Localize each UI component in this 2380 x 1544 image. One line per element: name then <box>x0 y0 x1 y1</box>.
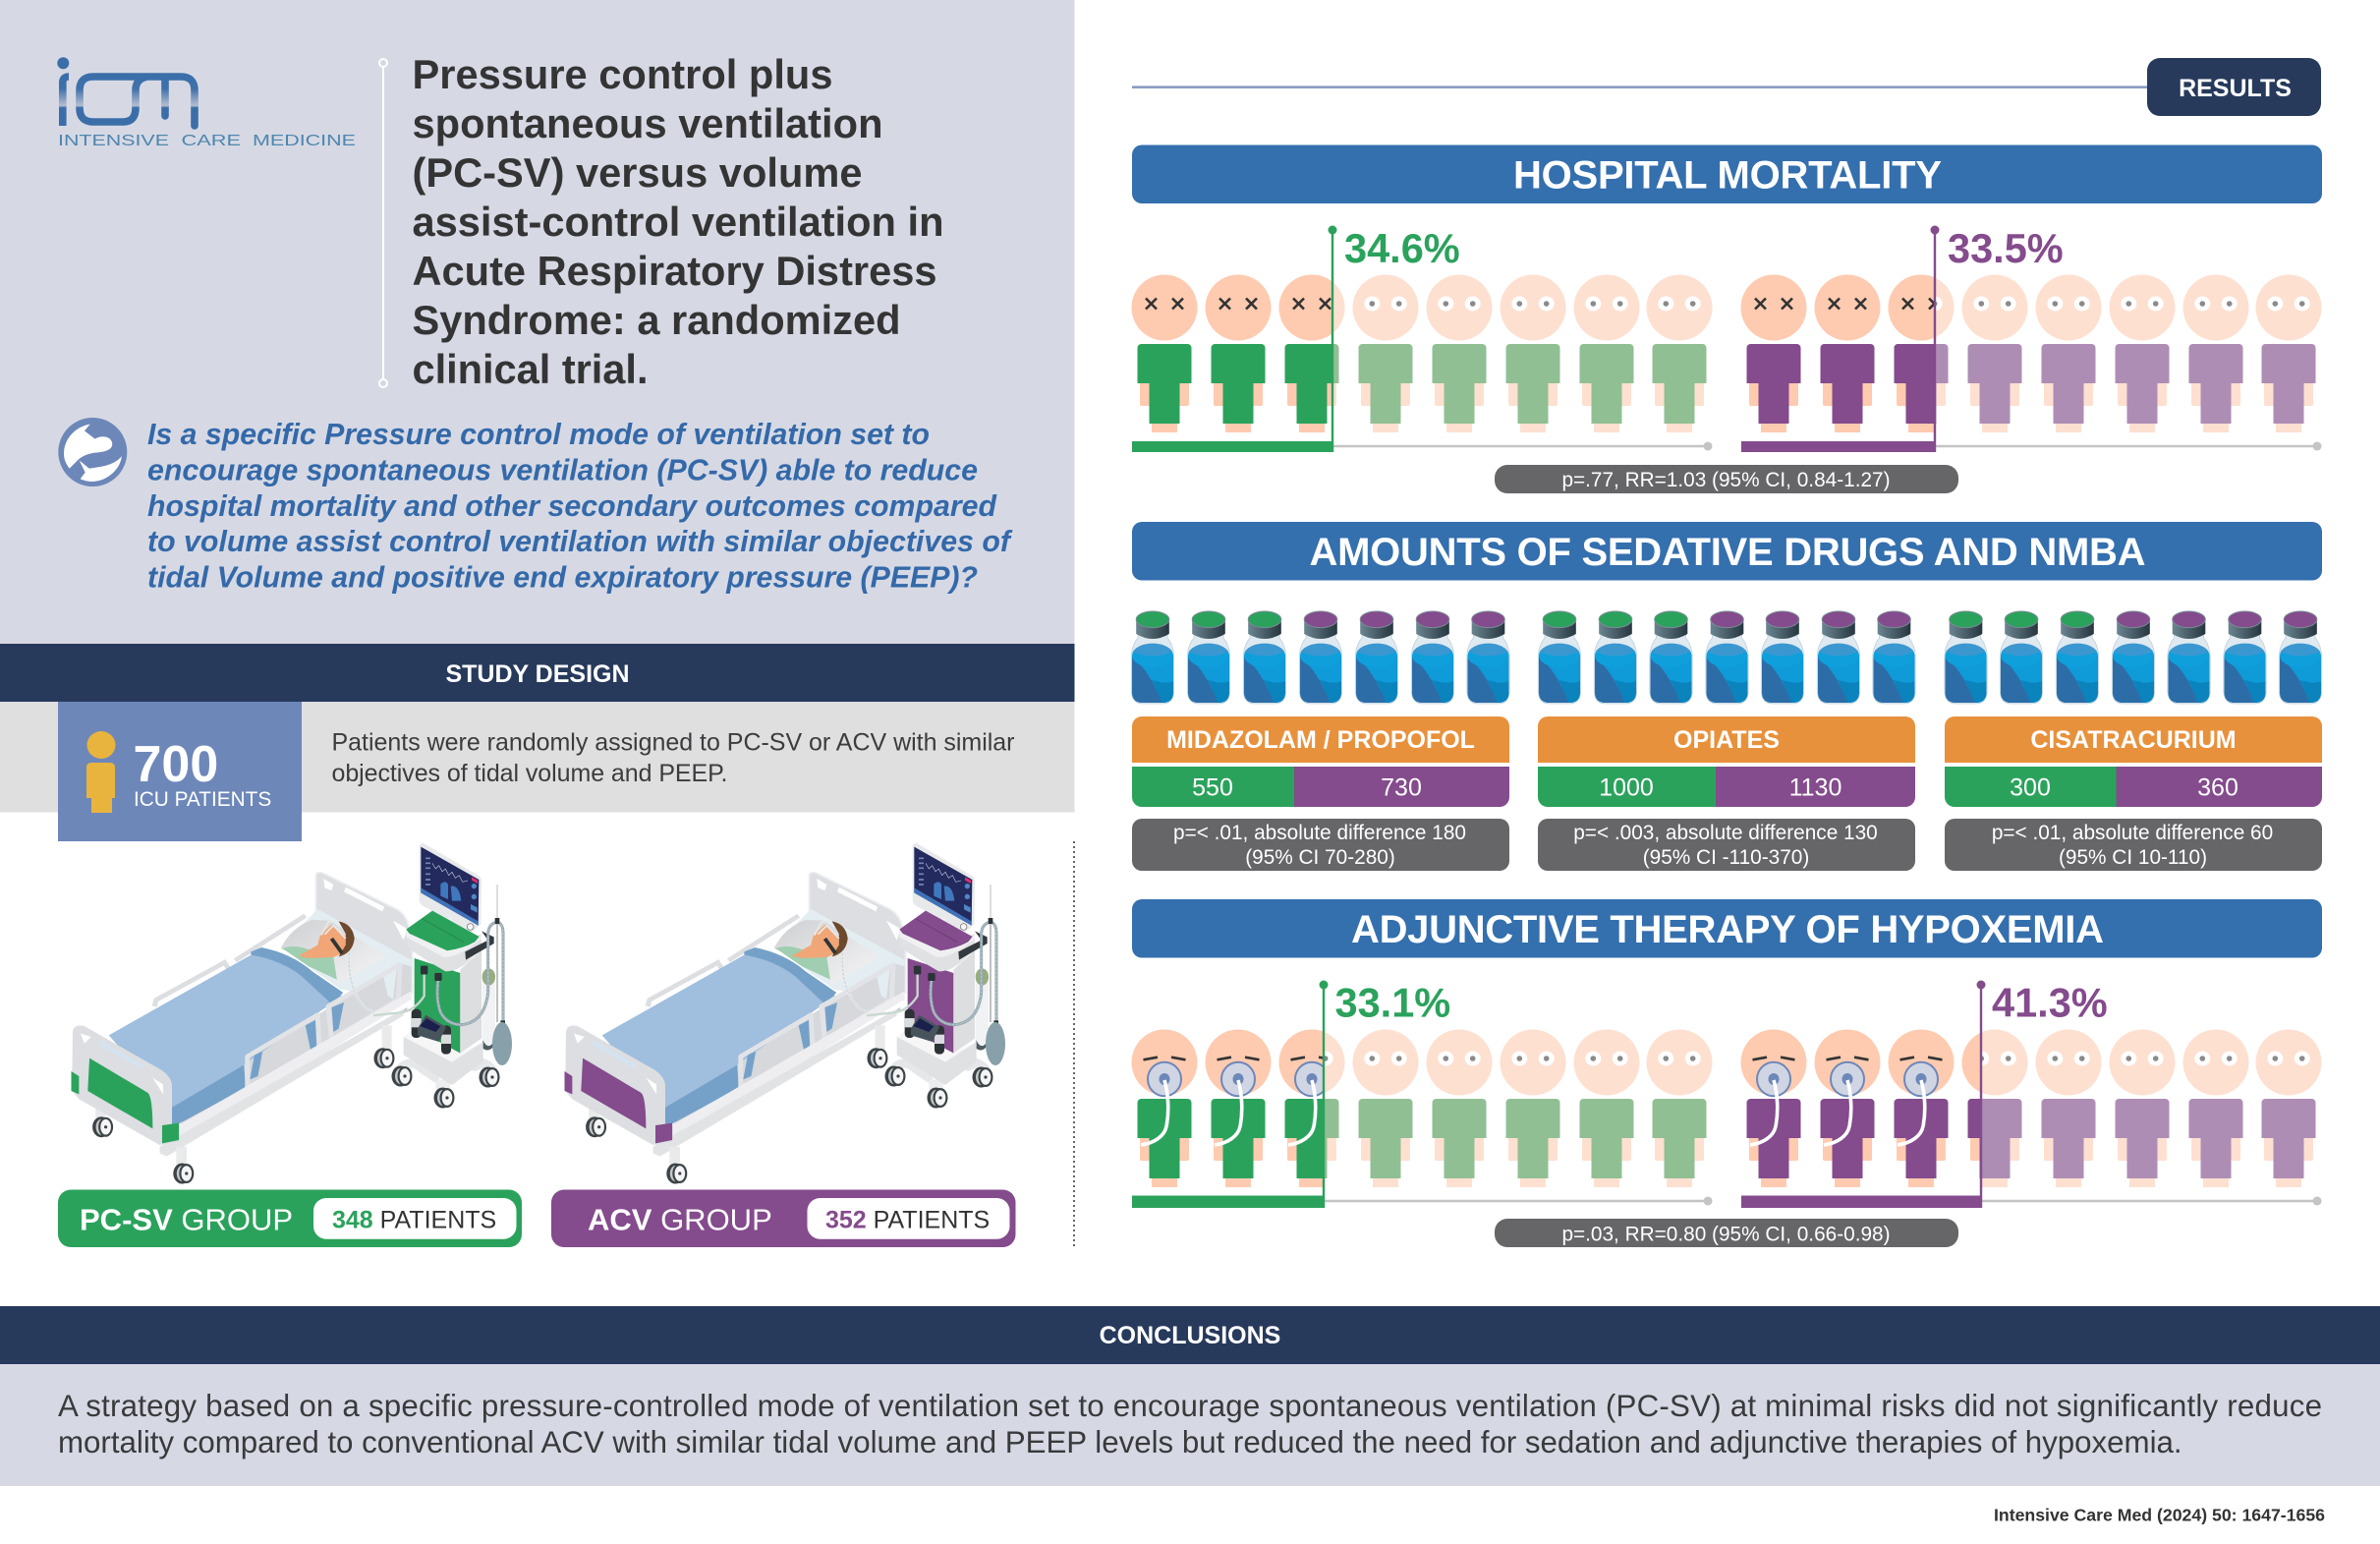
chart: hospital mortality PC-SV 34.6% <box>1132 225 1712 452</box>
panel: opiates <box>1538 611 1915 871</box>
illustration: ACV bed and ventilator <box>564 842 1005 1183</box>
label: PC-SV group: 348 PATIENTS <box>332 1206 496 1233</box>
panel: midazolam / propofol: (95% CI 70-280) <box>1245 846 1395 869</box>
statistics pill: adjunctive therapy: p=.03, RR=0.80 (95% CI, 0.66-0.98) <box>1561 1223 1891 1246</box>
heading: sedative drugs: AMOUNTS OF SEDATIVE DRUGS AND NMBA <box>1309 531 2146 574</box>
panel: midazolam / propofol: 730 <box>1381 773 1422 801</box>
research question text: encourage spontaneous ventilation (PC-SV) able to reduce <box>147 454 978 487</box>
icon: research question arrows <box>58 418 127 486</box>
panel: cisatracurium: p=< .01, absolute difference 60 <box>1992 822 2273 844</box>
illustration: PC-SV bed and ventilator <box>71 842 512 1183</box>
panel: cisatracurium: (95% CI 10-110) <box>2059 846 2207 869</box>
callout: 700 ICU patients: 700 <box>134 736 218 793</box>
callout: 700 ICU patients: ICU PATIENTS <box>134 788 271 811</box>
heading bar: study design: STUDY DESIGN <box>445 660 630 688</box>
title: clinical trial. <box>413 346 649 392</box>
research question text <box>147 419 1013 594</box>
conclusions text: A strategy based on a specific pressure-controlled mode of ventilation set to encourage spontaneous ventilation (PC-SV) at minimal risks did not significantly reduce <box>58 1389 2322 1423</box>
study description band: objectives of tidal volume and PEEP. <box>332 760 727 787</box>
chart: adjunctive therapy PC-SV 33.1% <box>1132 979 1712 1208</box>
heading bar: conclusions <box>0 1306 2380 1364</box>
panel: midazolam / propofol: p=< .01, absolute difference 180 <box>1173 822 1466 844</box>
title: Acute Respiratory Distress <box>413 248 937 294</box>
label: PC-SV group: PC-SV GROUP <box>80 1203 293 1237</box>
decorative title rule with end circles <box>379 59 387 387</box>
callout: 700 ICU patients <box>58 702 302 841</box>
title: assist-control ventilation in <box>413 199 943 245</box>
heading bar: study design <box>0 644 1075 702</box>
panel: midazolam / propofol: 550 <box>1192 773 1233 801</box>
research question text: to volume assist control ventilation with similar objectives of <box>147 526 1013 558</box>
logo: ICM Intensive Care Medicine: MEDICINE <box>253 133 356 149</box>
chart: hospital mortality PC-SV 34.6%: 34.6% <box>1344 225 1460 271</box>
citation: Intensive Care Med (2024) 50: 1647-1656 <box>1994 1506 2325 1525</box>
statistics pill: hospital mortality <box>1495 465 1958 493</box>
research question text: tidal Volume and positive end expiratory pressure (PEEP)? <box>147 562 978 594</box>
research question text: hospital mortality and other secondary outcomes compared <box>147 490 997 523</box>
logo: ICM Intensive Care Medicine: CARE <box>181 133 241 149</box>
label: ACV group: ACV GROUP <box>588 1203 772 1237</box>
chart: hospital mortality ACV 33.5%: 33.5% <box>1948 225 2064 271</box>
heading: hospital mortality: HOSPITAL MORTALITY <box>1513 153 1942 197</box>
panel: opiates: OPIATES <box>1673 726 1780 754</box>
label: ACV group: 352 PATIENTS <box>825 1206 990 1233</box>
title: spontaneous ventilation <box>413 100 882 146</box>
research question text: Is a specific Pressure control mode of ventilation set to <box>147 419 930 451</box>
panel: midazolam / propofol: MIDAZOLAM / PROPOFOL <box>1166 726 1475 754</box>
study description band <box>0 702 1075 812</box>
label: PC-SV group <box>58 1189 522 1247</box>
panel: opiates: 1000 <box>1599 773 1654 801</box>
heading bar: conclusions: CONCLUSIONS <box>1100 1322 1280 1349</box>
logo: ICM Intensive Care Medicine <box>57 57 356 149</box>
conclusions text: mortality compared to conventional ACV with similar tidal volume and PEEP levels but reduced the need for sedation and adjunctive therapies of hypoxemia. <box>58 1425 2182 1459</box>
conclusions text <box>0 1364 2380 1486</box>
statistics pill: adjunctive therapy <box>1495 1219 1958 1247</box>
panel: cisatracurium <box>1945 611 2322 871</box>
statistics pill: hospital mortality: p=.77, RR=1.03 (95% CI, 0.84-1.27) <box>1561 469 1891 491</box>
panel: opiates: 1130 <box>1789 773 1842 801</box>
study description band: Patients were randomly assigned to PC-SV or ACV with similar <box>332 729 1014 757</box>
panel: opiates: (95% CI -110-370) <box>1643 846 1809 869</box>
title <box>413 51 943 392</box>
panel: cisatracurium: 300 <box>2010 773 2051 801</box>
chart: hospital mortality ACV 33.5% <box>1741 225 2321 452</box>
heading: adjunctive therapy <box>1132 899 2322 957</box>
results tag and rule <box>1132 58 2321 116</box>
chart: adjunctive therapy ACV 41.3%: 41.3% <box>1992 979 2108 1026</box>
heading: sedative drugs <box>1132 522 2322 580</box>
panel: midazolam / propofol <box>1131 611 1509 871</box>
title: (PC-SV) versus volume <box>413 149 863 196</box>
panel: header background <box>0 0 1075 644</box>
heading: adjunctive therapy: ADJUNCTIVE THERAPY OF HYPOXEMIA <box>1351 908 2104 951</box>
chart: adjunctive therapy ACV 41.3% <box>1741 979 2321 1208</box>
panel: opiates: p=< .003, absolute difference 130 <box>1573 822 1878 844</box>
panel: cisatracurium: CISATRACURIUM <box>2030 726 2237 754</box>
chart: adjunctive therapy PC-SV 33.1%: 33.1% <box>1334 979 1450 1026</box>
logo: ICM Intensive Care Medicine: INTENSIVE <box>58 133 169 149</box>
results tag and rule: RESULTS <box>2179 75 2292 102</box>
title: Pressure control plus <box>413 51 833 97</box>
label: ACV group <box>551 1189 1016 1247</box>
heading: hospital mortality <box>1132 145 2322 203</box>
title: Syndrome: a randomized <box>413 297 900 343</box>
panel: cisatracurium: 360 <box>2197 773 2238 801</box>
